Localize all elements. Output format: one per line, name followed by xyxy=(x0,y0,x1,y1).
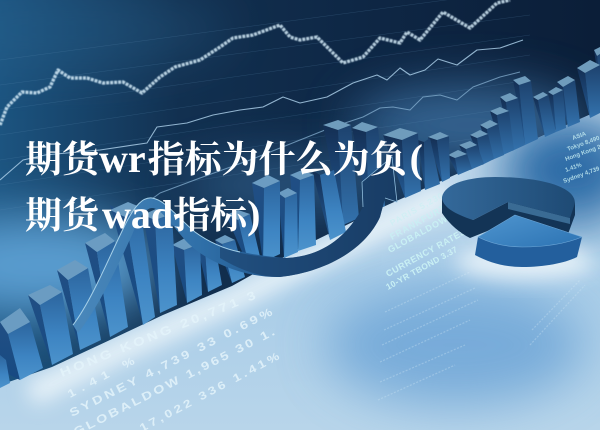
floor data text: market tickers: 1.41 % xyxy=(65,352,142,400)
pie chart glow xyxy=(455,244,595,280)
floor data text: market tickers: SYDNEY 4,739 33 0.69% xyxy=(67,304,277,419)
line chart: candlestick price line xyxy=(0,0,510,125)
line chart: lower indicator line xyxy=(130,72,520,215)
floor data text: exchange labels: CURRENCY RATES xyxy=(384,226,468,279)
line charts xyxy=(0,0,523,215)
pie: separated slice xyxy=(475,215,582,267)
faint data rows on floor xyxy=(378,272,585,400)
floor data text: exchange labels xyxy=(384,131,600,292)
floor data text: exchange labels: GLOBALDOW xyxy=(386,213,450,255)
title line 2: 期货wad指标) xyxy=(25,192,260,237)
dark bars: rising series on the right xyxy=(323,46,600,225)
floor data text: exchange labels: 1.41% xyxy=(565,162,583,174)
floor data text: market tickers: HONG KONG 20,771 3 xyxy=(58,287,260,379)
line chart: thin indicator line xyxy=(0,40,523,180)
blue bars: rising series on the left xyxy=(0,202,245,388)
floor data text: exchange labels: FRANKFURT xyxy=(388,203,448,242)
title line 1: 期货wr指标为什么为负( xyxy=(25,136,423,181)
light reflective floor xyxy=(0,110,600,430)
blue bars: central series xyxy=(226,170,346,270)
floor data text: exchange labels: ASIA xyxy=(572,131,588,142)
pie chart xyxy=(442,177,582,267)
pie: main disc xyxy=(442,177,575,238)
curved growth arrow xyxy=(73,157,397,333)
floor data text: exchange labels: Tokyo 8,490 xyxy=(567,135,600,153)
floor data text: exchange labels: PARIS 5,230 xyxy=(388,190,445,228)
floor data text: exchange labels: 10-YR TBOND 3.37 xyxy=(384,244,459,292)
title xyxy=(25,136,423,237)
